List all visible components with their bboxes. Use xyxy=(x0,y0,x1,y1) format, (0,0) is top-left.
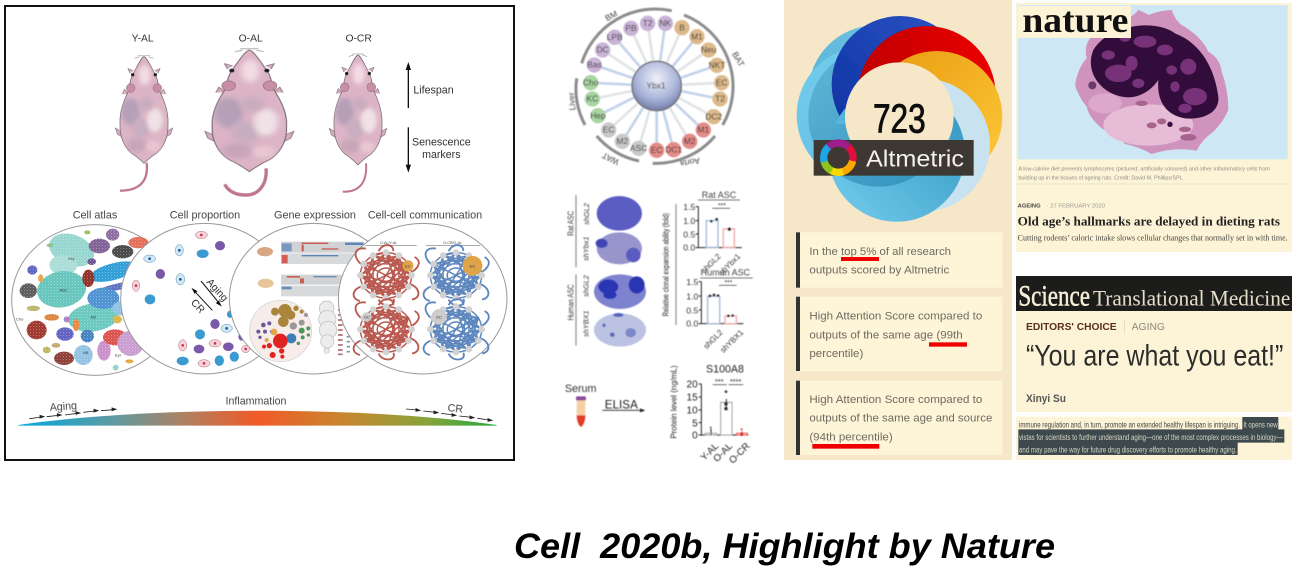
nodes: BAT: M1 xyxy=(691,31,703,41)
masthead: Science Translational Medicine: Science xyxy=(1018,280,1090,312)
nodes: BM: DC xyxy=(597,45,609,55)
chart: S100A8: S100A8 xyxy=(706,364,744,376)
chart: Rat ASC: 1.0 xyxy=(683,216,696,226)
circle: cell-cell communication xyxy=(338,223,507,374)
network: top right blue xyxy=(424,245,489,306)
plate row labels: shYBX1 xyxy=(582,310,591,337)
plate row labels: shGL2 xyxy=(582,275,591,297)
rat: Y-AL xyxy=(115,56,173,191)
label: CR trend: CR xyxy=(447,402,464,416)
label: ELISA: ELISA xyxy=(605,399,638,412)
chart: S100A8: 0 xyxy=(692,431,698,442)
chart: Human ASC: 0.5 xyxy=(686,305,699,315)
chart: Human ASC: shGL2 xyxy=(702,328,725,351)
beige panel background xyxy=(784,0,1012,460)
chart: S100A8: 15 xyxy=(687,393,698,404)
nature masthead: nature xyxy=(1022,0,1128,40)
chart: Human ASC: *** xyxy=(724,279,733,286)
spokes xyxy=(591,23,722,150)
card: top 5% xyxy=(796,232,1002,288)
panel: Science Translational Medicine xyxy=(1016,276,1292,460)
card: 94th percentile: High Attention Score compared to xyxy=(809,394,982,406)
card: 99th percentile xyxy=(796,297,1002,371)
rats row xyxy=(115,34,471,195)
label: Aging: Aging xyxy=(204,277,230,304)
card: top 5%: In the top 5% of all research xyxy=(809,246,951,258)
Altmetric badge xyxy=(814,140,974,176)
chart: S100A8: 5 xyxy=(692,418,698,429)
arrow: senescence down xyxy=(406,127,411,173)
circle: cell atlas: M1 xyxy=(83,350,90,355)
chart: Rat ASC: 0.0 xyxy=(683,243,696,253)
chart: Rat ASC: shYbx1 xyxy=(717,252,743,277)
label: O-AL: O-AL xyxy=(239,34,263,45)
panel: Altmetric xyxy=(784,0,1012,460)
hub: Ybx1: Ybx1 xyxy=(647,81,666,91)
icon: serum tube xyxy=(576,396,586,427)
network: top left red: EC xyxy=(405,263,411,268)
photo caption xyxy=(1018,167,1271,182)
panel: graphical abstract xyxy=(5,6,514,460)
nodes: BAT: B xyxy=(679,22,685,32)
chart: S100A8: 20 xyxy=(687,380,698,391)
panel: Nature news article xyxy=(1016,0,1292,252)
chart: Rat ASC: *** xyxy=(718,202,726,209)
nodes: BAT: DC2 xyxy=(705,111,722,121)
nodes: BAT xyxy=(674,20,729,124)
chart: Rat ASC: 1.5 xyxy=(683,202,696,212)
nodes: Liver: KC xyxy=(587,94,598,104)
chart: S100A8: 10 xyxy=(687,406,698,417)
tissue labels: Aorta xyxy=(679,156,701,169)
chart: S100A8: Y-AL xyxy=(699,441,722,463)
nodes: BM: PB xyxy=(625,23,637,33)
photo caption: building up in the tissues of ageing rats. Credit: David M. Phillips/SPL xyxy=(1018,176,1183,182)
card: 99th percentile: percentile) xyxy=(809,348,863,360)
article meta: AGEING and date: · 27 FEBRUARY 2020 xyxy=(1047,204,1105,210)
heading: Gene expression: Gene expression xyxy=(274,209,356,221)
Altmetric donut xyxy=(797,16,1002,222)
article headline: Old age’s hallmarks are delayed in dieting rats xyxy=(1018,214,1280,229)
nodes: Aorta: M1 xyxy=(698,125,709,135)
card: 99th percentile: outputs of the same age (99th xyxy=(809,329,963,341)
nodes: WAT xyxy=(601,122,647,156)
chart: Rat ASC: shGL2 xyxy=(700,252,723,275)
score: 723: 723 xyxy=(873,96,926,142)
nodes: BAT: Neu xyxy=(701,45,717,55)
panel: clonal expansion and ELISA xyxy=(565,190,753,466)
circle: cell proportion xyxy=(121,223,289,374)
arrows: aging trend xyxy=(29,408,116,419)
tissue labels: Liver xyxy=(566,92,577,111)
nodes: Aorta: DC1 xyxy=(665,144,682,154)
heading: Cell atlas: Cell atlas xyxy=(73,209,118,221)
article meta: AGEING and date xyxy=(1018,204,1105,210)
photo caption: A low-calorie diet prevents lymphocytes (pictured; artificially coloured) and other inflammatory cells from xyxy=(1018,167,1271,173)
tissue labels: BM xyxy=(603,8,619,23)
panel: Ybx1 network wheel xyxy=(566,8,747,169)
nodes: Aorta: EC xyxy=(651,145,662,155)
y axis title: relative clonal expansion: Relative clonal expansion ability (fold) xyxy=(662,213,671,316)
chart: Human ASC: shYBX1 xyxy=(719,328,746,355)
network: top right blue: EC xyxy=(470,263,475,268)
network: bottom right blue: DC xyxy=(436,314,442,319)
plate row labels xyxy=(566,203,591,337)
network: bottom left red xyxy=(354,299,419,360)
nodes: Liver xyxy=(583,75,606,123)
chart: Rat ASC: Rat ASC xyxy=(702,190,737,200)
plate row labels: Human ASC xyxy=(566,284,575,320)
nodes: BM xyxy=(587,16,673,73)
card: 94th percentile: outputs of the same age and source xyxy=(809,413,992,425)
hub: Ybx1 xyxy=(632,61,681,111)
nodes: BAT: T2 xyxy=(715,94,725,104)
analysis circles and bar xyxy=(12,209,507,426)
chart: S100A8: O-CR xyxy=(727,441,752,466)
circle: cell atlas: M2 xyxy=(91,314,97,319)
label: Lifespan: Lifespan xyxy=(413,85,454,97)
nodes: Aorta xyxy=(649,122,711,158)
label: CR: CR xyxy=(188,298,206,316)
attention cards xyxy=(796,232,1002,455)
chart: S100A8: *** xyxy=(715,377,724,386)
cream article header: AGING xyxy=(1132,322,1165,333)
chart: Human ASC: 0.0 xyxy=(686,319,699,329)
arrow: ELISA xyxy=(602,408,645,412)
card: 94th percentile: (94th percentile) xyxy=(809,431,893,443)
masthead: Science Translational Medicine xyxy=(1016,276,1292,312)
Altmetric badge: Altmetric xyxy=(866,146,964,172)
heading: Cell proportion: Cell proportion xyxy=(170,209,240,221)
chart: Rat ASC: 0.5 xyxy=(683,229,696,239)
inflammation gradient bar xyxy=(18,411,497,426)
circle: cell atlas: Cho xyxy=(16,317,24,322)
nodes: BM: T2 xyxy=(643,18,653,28)
rat: O-AL xyxy=(205,49,294,195)
label: Aging trend: Aging xyxy=(49,400,77,414)
circle: cell atlas: ASC xyxy=(59,288,68,293)
label: Y-AL: Y-AL xyxy=(132,34,154,45)
chart: Human ASC: 1.0 xyxy=(686,291,699,301)
clone plates xyxy=(594,196,646,347)
photo: lymphocyte micrograph xyxy=(1018,5,1288,159)
rat: O-CR xyxy=(329,54,387,192)
label: Senescence markers: Senescence xyxy=(412,137,471,149)
nodes: Liver: Hep xyxy=(590,110,606,120)
tissue labels: WAT xyxy=(600,150,621,168)
chart: Human ASC: 1.5 xyxy=(686,277,699,287)
bottom caption: Cell 2020b, Highlight by Nature xyxy=(514,527,1055,566)
article standfirst: Cutting rodents’ caloric intake slows cellular changes that normally set in with time. xyxy=(1018,233,1288,242)
heading: Cell-cell communication: Cell-cell communication xyxy=(368,209,482,221)
arrows: CR trend xyxy=(406,409,492,421)
label: Senescence markers: markers xyxy=(422,149,461,161)
circle: cell atlas: Epi xyxy=(115,353,121,358)
cream article background xyxy=(1016,3,1292,252)
network: top left red xyxy=(354,245,419,306)
network header: O-CR/O-AL: O-CR/O-AL xyxy=(443,241,462,245)
nodes: BAT: EC xyxy=(716,77,727,87)
nodes: BM: LPB xyxy=(607,32,623,42)
nodes: Liver: Cho xyxy=(583,77,599,87)
tissue labels: BAT xyxy=(730,50,747,68)
network: bottom left red: DC xyxy=(364,314,370,319)
card: 99th percentile: High Attention Score compared to xyxy=(809,311,982,323)
network: bottom right blue xyxy=(424,299,489,360)
label: O-CR: O-CR xyxy=(345,34,372,45)
plate row labels: shGL2 xyxy=(582,203,591,225)
cream article header: Xinyi Su xyxy=(1026,393,1066,405)
cream article header: EDITORS' CHOICE xyxy=(1026,322,1117,333)
panel frame xyxy=(5,6,514,460)
nodes: WAT: ASC xyxy=(630,143,647,153)
plate row labels: Rat ASC xyxy=(566,211,575,236)
chart: S100A8: O-AL xyxy=(711,441,736,465)
circle: cell atlas: Ery xyxy=(68,256,74,261)
tissue arcs xyxy=(576,9,733,163)
arrows: aging and CR xyxy=(193,281,221,310)
plate row labels: shYbx1 xyxy=(582,236,591,261)
cream article header xyxy=(1016,311,1292,412)
chart: S100A8 xyxy=(669,364,752,466)
chart: Human ASC: Human ASC xyxy=(701,267,751,277)
label: Serum: Serum xyxy=(565,383,596,395)
card: 94th percentile xyxy=(796,381,1002,455)
chart: Rat ASC xyxy=(683,190,743,277)
circle: cell atlas xyxy=(12,225,178,375)
chart: Human ASC xyxy=(686,267,753,355)
label: Inflammation: Inflammation xyxy=(225,395,287,407)
chart: S100A8: Protein level (ng/mL) xyxy=(669,365,679,439)
circle: gene expression xyxy=(229,223,397,374)
network header: O-AL/Y-AL: O-AL/Y-AL xyxy=(380,241,397,245)
arrow: lifespan up xyxy=(406,62,411,108)
highlighted quote xyxy=(1016,417,1292,460)
nodes: BAT: NKT xyxy=(709,60,725,70)
nodes: BM: Bas xyxy=(587,60,602,70)
tissue labels xyxy=(566,8,747,169)
highlighted quote: It opens new xyxy=(1243,419,1278,429)
chart: S100A8: **** xyxy=(730,377,742,386)
card: top 5%: outputs scored by Altmetric xyxy=(809,265,950,277)
nodes: WAT: EC xyxy=(603,125,614,135)
nodes: BM: NK xyxy=(660,18,672,28)
nodes: Aorta: M2 xyxy=(684,136,696,146)
nodes: WAT: M2 xyxy=(617,136,628,146)
article meta: AGEING and date: AGEING xyxy=(1018,204,1041,210)
